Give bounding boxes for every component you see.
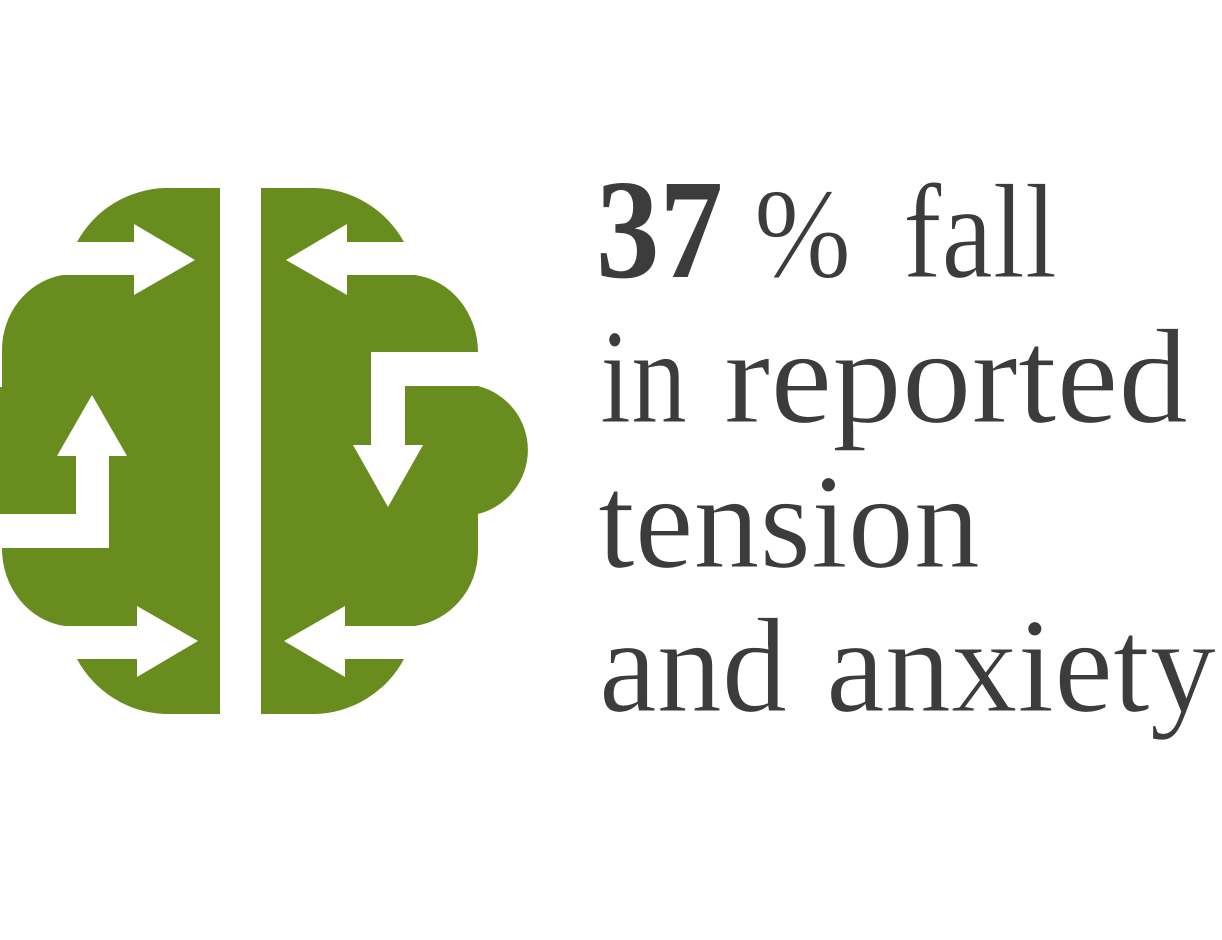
- line 1: 37% fall: fall: [903, 158, 1057, 307]
- line 4: and anxiety: anxiety: [826, 592, 1216, 741]
- headline text: [596, 150, 1216, 741]
- line 2: in reported: reported: [724, 303, 1188, 452]
- line 4: and anxiety: and: [599, 592, 787, 741]
- line 2: in reported: in: [600, 303, 687, 452]
- icon: brain with arrows: [0, 188, 528, 714]
- line 4: and anxiety: [599, 592, 1216, 741]
- line 1: 37% fall: [596, 150, 1057, 308]
- right hemisphere: [261, 188, 528, 714]
- line 3: tension: tension: [598, 448, 980, 597]
- line 1: 37% fall: 37: [596, 150, 723, 308]
- line 1: 37% fall: %: [754, 163, 851, 305]
- left hemisphere: [0, 188, 220, 714]
